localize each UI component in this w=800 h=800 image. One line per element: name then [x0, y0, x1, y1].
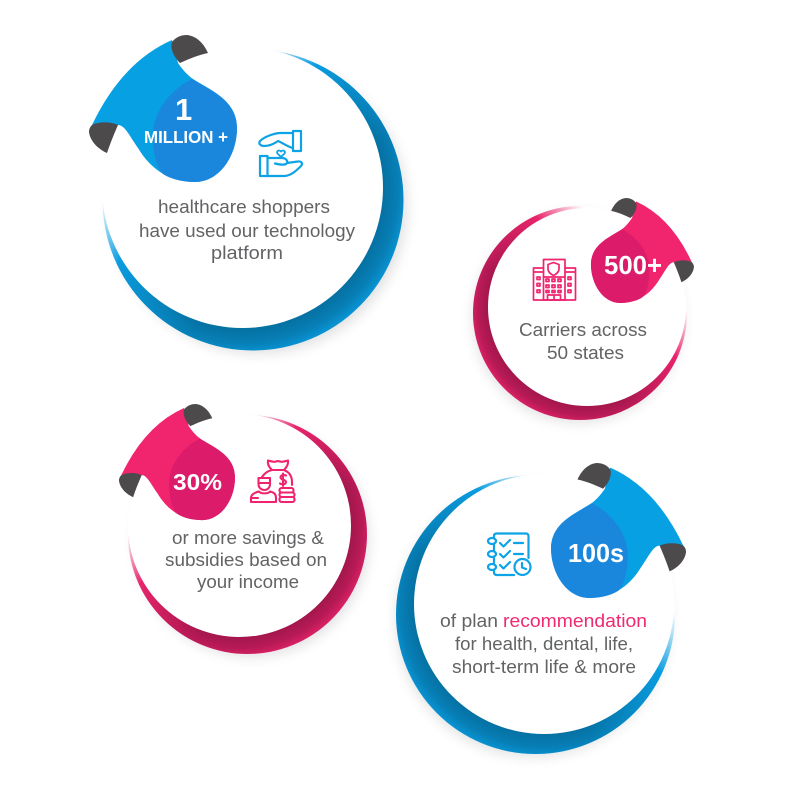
ribbon badge — [119, 404, 235, 520]
description text — [139, 196, 356, 263]
stat: 500+: 500+ — [604, 250, 662, 280]
description text: healthcare shoppers — [158, 196, 330, 217]
icon: caring hands with heart — [259, 131, 302, 176]
stat: 1 million + — [144, 92, 228, 147]
description text: recommendation — [503, 610, 647, 631]
icon: checklist with clock — [488, 534, 530, 575]
description text: Carriers across — [519, 319, 647, 340]
white circle — [102, 47, 383, 328]
description text: for health, dental, life, — [455, 633, 633, 654]
description text: have used our technology — [139, 220, 356, 241]
crescent backing circle — [470, 206, 687, 426]
description text: subsidies based on — [165, 549, 327, 570]
stat: 100s: 100s — [568, 538, 624, 568]
crescent backing circle — [102, 51, 410, 357]
ribbon badge — [591, 198, 694, 303]
description text — [440, 610, 647, 677]
description text: short-term life & more — [452, 656, 636, 677]
panel: 1 million healthcare shoppers — [76, 20, 410, 354]
crescent backing circle — [128, 415, 372, 660]
stat: 1 million +: MILLION + — [144, 127, 228, 147]
description text: of plan — [440, 610, 498, 631]
icon: money bag, person and coins — [251, 460, 294, 502]
description text: or more savings & — [172, 527, 325, 548]
description text — [165, 527, 327, 592]
ribbon badge — [551, 463, 686, 598]
stat: 30%: 30% — [173, 469, 222, 495]
panel: 100s of plan recommendations — [390, 450, 698, 758]
icon: hospital building — [534, 260, 576, 300]
white circle — [488, 208, 686, 406]
description text: 50 states — [547, 342, 624, 363]
description text — [519, 319, 647, 363]
description text: platform — [211, 242, 283, 263]
panel: 500+ carriers — [470, 190, 704, 424]
crescent backing circle — [393, 475, 675, 760]
description text: your income — [197, 571, 299, 592]
white circle — [414, 474, 674, 734]
panel: 30% savings — [108, 394, 372, 658]
ribbon badge — [89, 35, 237, 182]
stat: 1 million +: 1 — [175, 92, 192, 127]
white circle — [128, 414, 351, 637]
